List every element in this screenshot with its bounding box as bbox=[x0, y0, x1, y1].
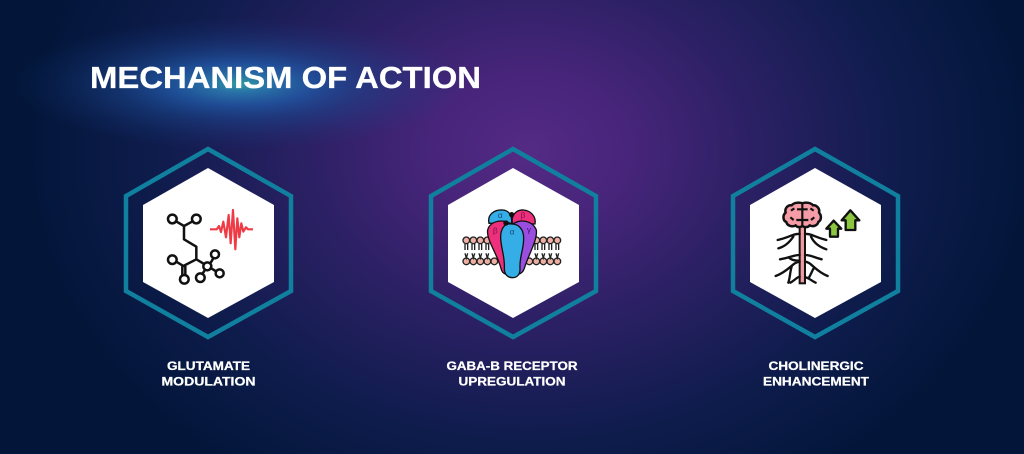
label 3: ENHANCEMENT bbox=[763, 374, 870, 388]
label 1 bbox=[162, 359, 256, 388]
white hexagon 1 bbox=[143, 168, 274, 318]
lipid bilayer bbox=[463, 237, 561, 265]
panel: glutamate modulation bbox=[126, 149, 291, 388]
nerves bbox=[776, 234, 828, 283]
greek letters: α bbox=[510, 226, 515, 236]
brain bbox=[783, 203, 821, 227]
brain folds bbox=[790, 203, 814, 227]
subunit alpha top bbox=[489, 210, 512, 223]
label 1: GLUTAMATE bbox=[167, 359, 250, 373]
icon: receptor in membrane bbox=[463, 210, 561, 278]
greek letters: γ bbox=[527, 224, 532, 234]
greek letters: β bbox=[521, 210, 526, 220]
panel: cholinergic enhancement bbox=[733, 149, 898, 388]
greek letters: α bbox=[498, 210, 503, 220]
subunit beta top bbox=[512, 210, 535, 224]
subunit gamma bbox=[511, 221, 536, 275]
label 1: MODULATION bbox=[162, 374, 256, 388]
binding dots bbox=[509, 212, 514, 217]
arrow large bbox=[842, 210, 859, 230]
label 2: UPREGULATION bbox=[458, 374, 566, 388]
outer hexagon 3 bbox=[733, 149, 898, 337]
label 3: CHOLINERGIC bbox=[768, 359, 864, 373]
white hexagon 3 bbox=[750, 168, 881, 318]
outer hexagon 1 bbox=[126, 149, 291, 337]
icon: red wave signal bbox=[210, 210, 253, 249]
white hexagon 2 bbox=[448, 168, 579, 318]
spinal cord bbox=[800, 223, 805, 283]
subunit beta left bbox=[488, 221, 512, 275]
greek letters bbox=[493, 210, 532, 236]
title: MECHANISM OF ACTION bbox=[90, 60, 481, 95]
icon: glutamate molecule bbox=[168, 215, 224, 284]
panel: gaba-b receptor upregulation bbox=[431, 149, 596, 388]
label 2 bbox=[446, 359, 578, 388]
outer hexagon 2 bbox=[431, 149, 596, 337]
icon: brain and spinal nerves bbox=[776, 203, 859, 283]
label 2: GABA-B RECEPTOR bbox=[446, 359, 578, 373]
label 3 bbox=[763, 359, 870, 388]
subunit alpha centre bbox=[501, 224, 524, 278]
title glow bbox=[15, 18, 465, 150]
arrow small bbox=[826, 221, 841, 237]
greek letters: β bbox=[493, 225, 498, 235]
